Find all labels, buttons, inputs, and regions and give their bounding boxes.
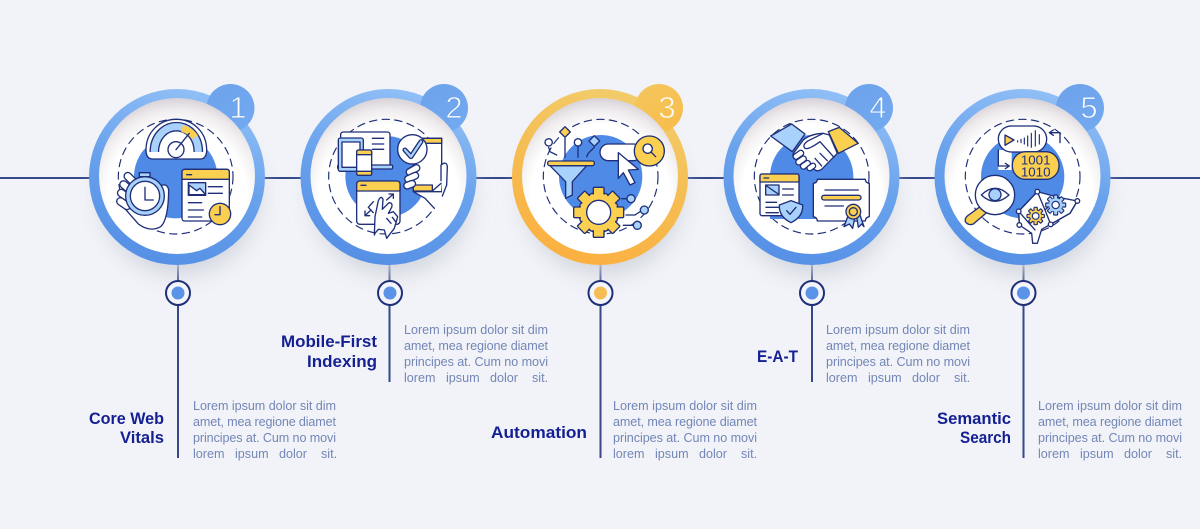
body text 3: ipsum [655,447,689,461]
shadow 2 [314,118,470,274]
body text 4: lorem [826,371,858,385]
number badge 5: 5 [1080,90,1098,125]
body text 5 [1038,399,1182,461]
body text 1: Lorem ipsum dolor sit dim [193,399,336,413]
inner disc 2 [310,98,466,254]
body text 1: principes at. Cum no movi [193,431,336,445]
body text 5: ipsum [1080,447,1114,461]
body text 3 [613,399,758,461]
body text 2: Lorem ipsum dolor sit dim [404,323,548,337]
ring 4 [724,89,900,265]
body text 3: lorem [613,447,644,461]
icon: voice data, binary, eye search and AI brain [965,119,1080,243]
heading 2: Mobile-First [281,332,377,351]
icon: voice data, binary, eye search and AI brain: 1001 [1021,152,1050,167]
inner disc 4 [734,98,890,254]
body text 4: amet, mea regione diamet [826,339,970,353]
body text 1 [193,399,337,461]
body text 4: ipsum [868,371,902,385]
body text 4: Lorem ipsum dolor sit dim [826,323,970,337]
body text 2: amet, mea regione diamet [404,339,548,353]
number badge 2 [420,84,468,132]
body text 5: principes at. Cum no movi [1038,431,1182,445]
body text 2: sit. [532,371,548,385]
heading 2 [281,332,377,371]
body text 5: sit. [1166,447,1182,461]
body text 3: amet, mea regione diamet [613,415,758,429]
number badge 1: 1 [229,90,247,125]
node 2 [378,281,402,305]
body text 4 [826,323,970,385]
body text 3: Lorem ipsum dolor sit dim [613,399,757,413]
body text 3: dolor [699,447,727,461]
number badge 4 [845,84,893,132]
heading 1: Core Web [89,409,164,428]
vertical connector 2 [388,262,390,382]
body text 2: dolor [490,371,518,385]
number badge 1 [206,84,254,132]
node 4 [800,281,824,305]
heading 1: Vitals [120,428,164,447]
node 1 [166,281,190,305]
icon: funnel, cursor and gear automation [543,119,664,237]
heading 3: Automation [491,423,587,442]
step 4: E-A-T [724,84,970,385]
icon: voice data, binary, eye search and AI brain: 1010 [1021,164,1050,179]
body text 2 [404,323,548,385]
body text 2: ipsum [446,371,480,385]
node 5 [1012,281,1036,305]
icon: responsive devices and touch gestures [329,119,447,238]
body text 1: lorem [193,447,224,461]
heading 5: Semantic [937,409,1011,428]
vertical connector 4 [811,262,813,382]
number badge 3: 3 [658,90,676,125]
body text 1: dolor [279,447,307,461]
ring 3 [512,89,688,265]
number badge 4: 4 [869,90,887,125]
step 2: Mobile-First Indexing [281,84,548,385]
step 3: Automation [491,84,758,461]
step 5: Semantic Search [934,84,1182,461]
body text 5: Lorem ipsum dolor sit dim [1038,399,1182,413]
heading 1 [89,409,164,447]
shadow 1 [102,118,258,274]
vertical connector 1 [177,262,179,458]
icon: handshake, secure page and certificate [754,119,869,234]
body text 3: principes at. Cum no movi [613,431,757,445]
heading 5: Search [960,428,1011,447]
vertical connector 3 [600,262,602,458]
body text 5: dolor [1124,447,1152,461]
ring 1 [89,89,265,265]
body text 1: sit. [321,447,337,461]
body text 1: amet, mea regione diamet [193,415,336,429]
number badge 2: 2 [445,90,463,125]
shadow 3 [525,118,681,274]
number badge 5 [1056,84,1104,132]
heading 4: E-A-T [757,347,799,366]
body text 1: ipsum [235,447,269,461]
ring 5 [934,89,1110,265]
shadow 5 [948,118,1104,274]
shadow 4 [736,118,892,274]
number badge 3 [635,84,683,132]
body text 4: principes at. Cum no movi [826,355,970,369]
inner disc 3 [522,98,678,254]
body text 3: sit. [741,447,757,461]
heading 5 [937,409,1011,447]
node 3 [588,281,612,305]
step 1: Core Web Vitals [89,84,337,461]
body text 5: amet, mea regione diamet [1038,415,1182,429]
ring 2 [300,89,476,265]
body text 2: lorem [404,371,436,385]
heading 2: Indexing [307,352,377,371]
icon: speed gauge, stopwatch and web page [115,119,233,234]
horizontal connector line [0,177,1200,179]
inner disc 1 [99,98,255,254]
vertical connector 5 [1022,262,1024,458]
body text 4: dolor [912,371,940,385]
body text 4: sit. [954,371,970,385]
body text 5: lorem [1038,447,1070,461]
body text 2: principes at. Cum no movi [404,355,548,369]
inner disc 5 [944,98,1100,254]
